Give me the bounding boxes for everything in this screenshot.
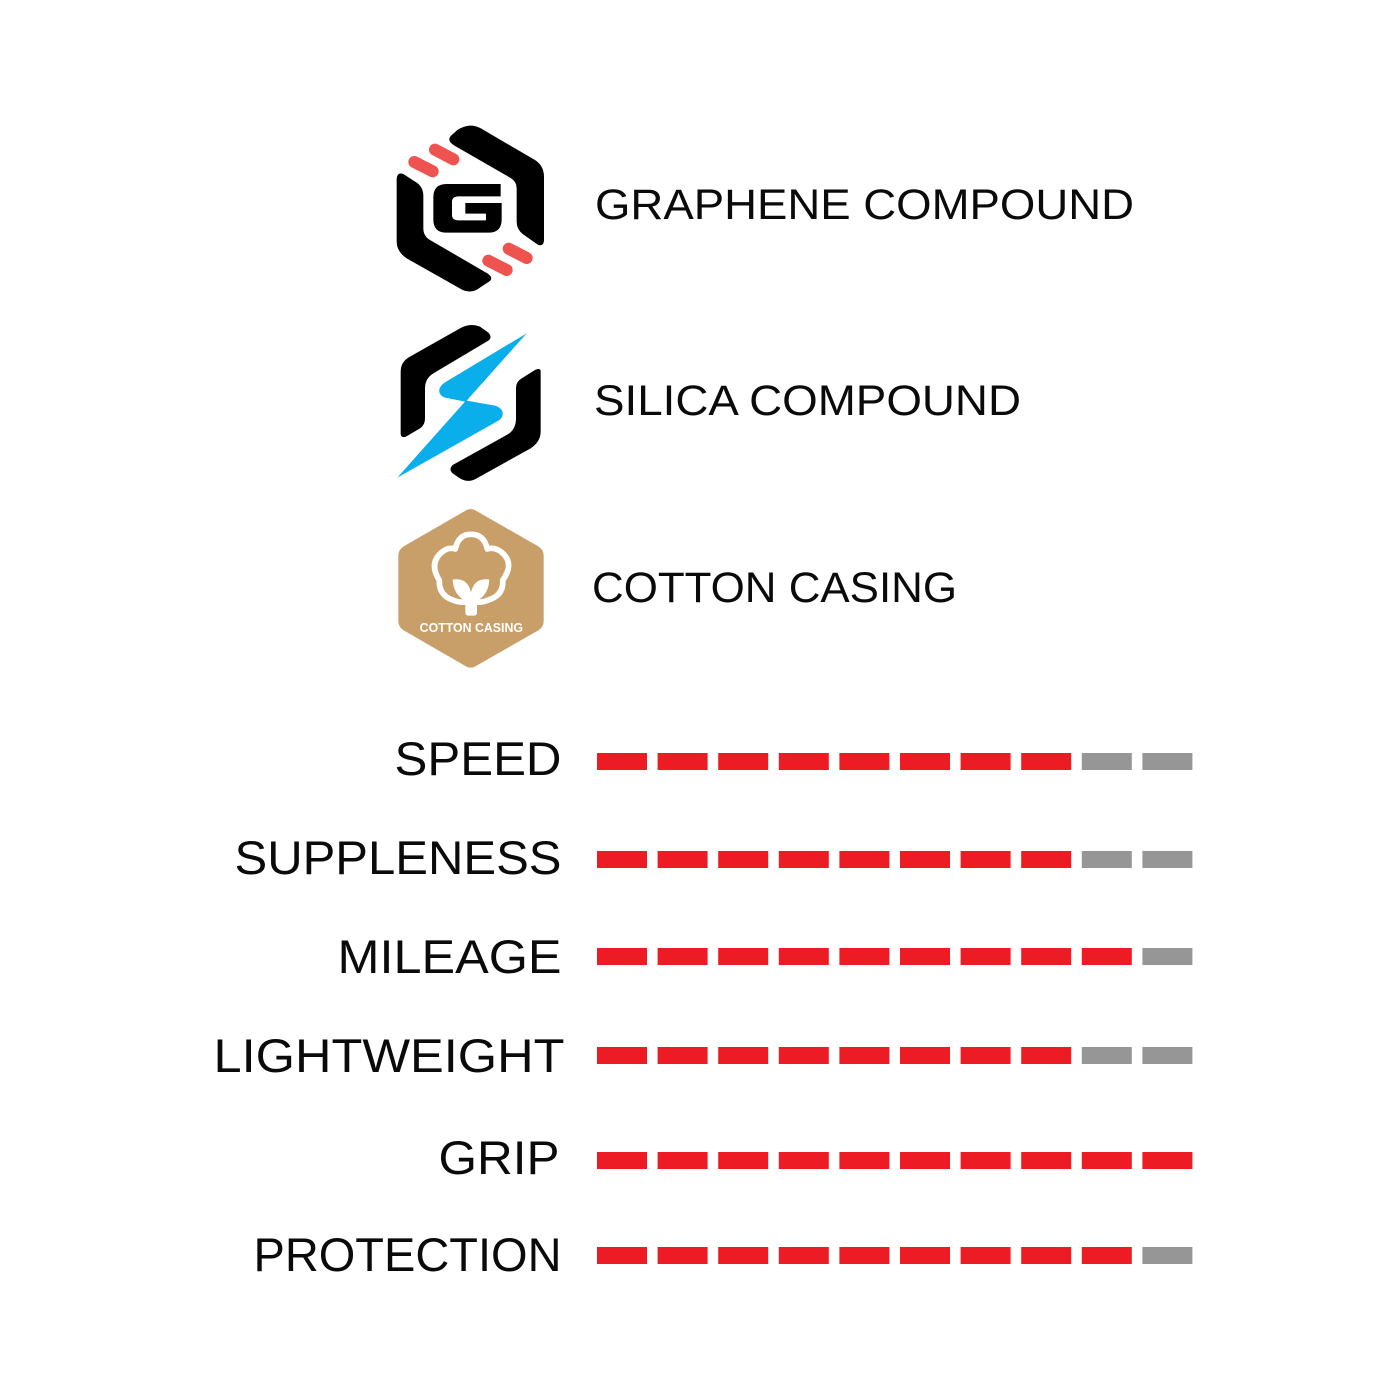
label: suppleness: SUPPLENESS [234,831,562,884]
rating bar: lightweight 8 of 10 [597,1047,1192,1064]
rating bar: speed 8 of 10 [597,753,1192,770]
icon: graphene compound [397,126,544,292]
heading: graphene compound: GRAPHENE COMPOUND [595,181,1134,229]
icon: cotton casing [398,509,544,668]
heading: cotton casing: COTTON CASING [592,564,957,612]
label: mileage: MILEAGE [338,930,562,983]
icon: silica compound [397,325,541,481]
heading: silica compound: SILICA COMPOUND [594,377,1021,425]
rating bar: grip 10 of 10 [597,1152,1192,1169]
rating bar: protection 9 of 10 [597,1247,1192,1264]
rating bar: suppleness 8 of 10 [597,851,1192,868]
label: speed: SPEED [394,732,562,785]
icon: cotton casing: COTTON CASING [420,620,523,635]
label: protection: PROTECTION [254,1228,562,1281]
rating bar: mileage 9 of 10 [597,948,1192,965]
label: grip: GRIP [438,1131,560,1184]
label: lightweight: LIGHTWEIGHT [214,1029,564,1082]
